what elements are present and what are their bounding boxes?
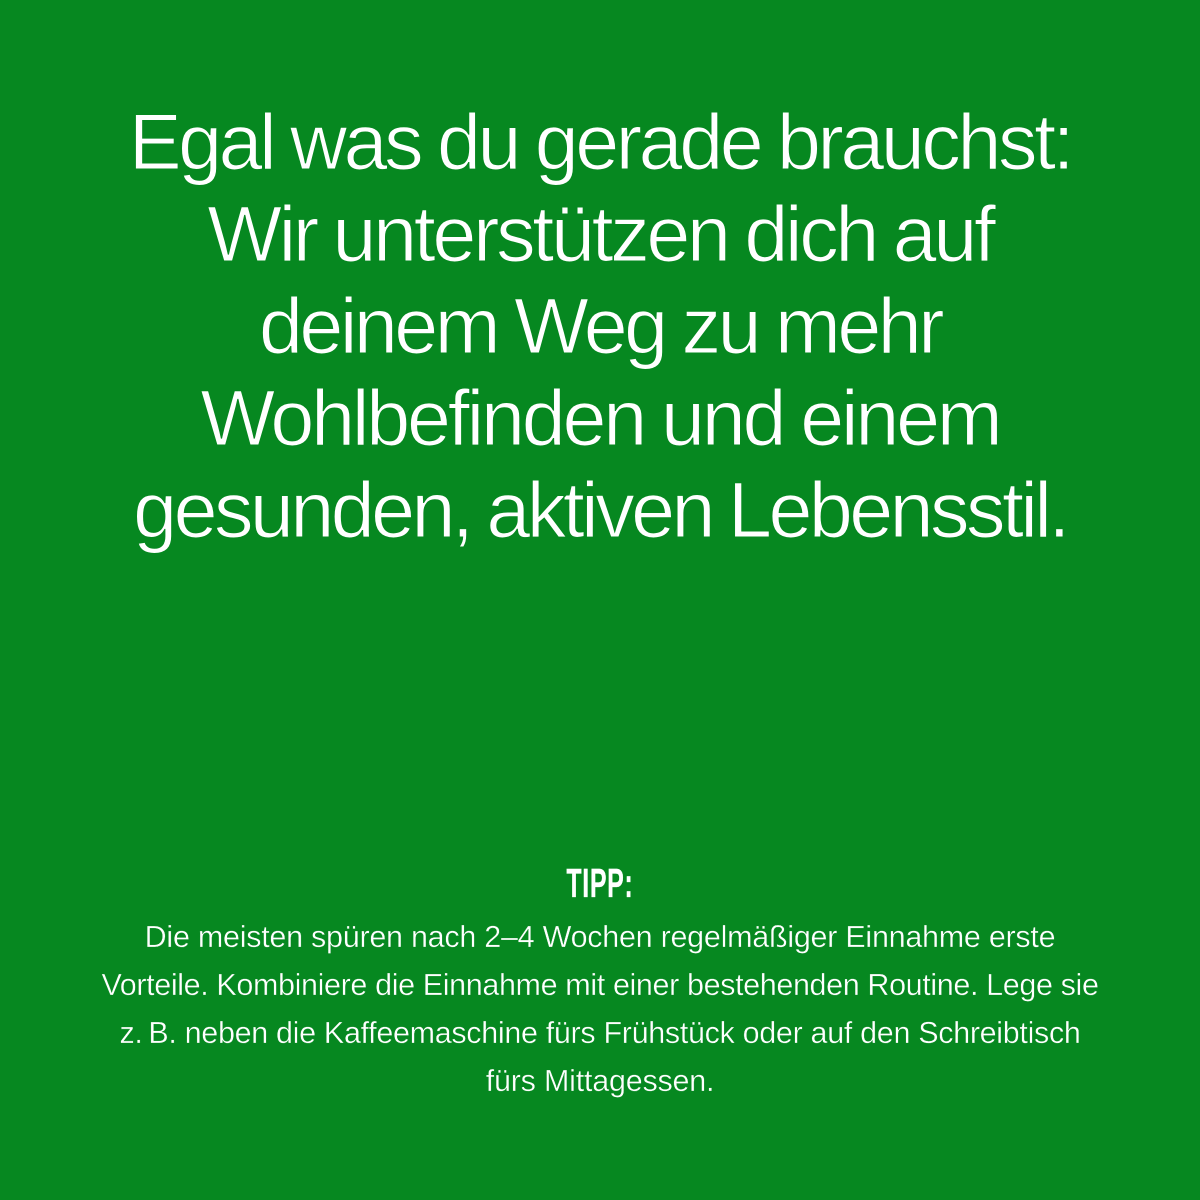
tip text bbox=[101, 920, 1099, 1098]
tip text: z. B. neben die Kaffeemaschine fürs Frühstück oder auf den Schreibtisch bbox=[119, 1016, 1081, 1050]
title bbox=[129, 97, 1071, 554]
title: Egal was du gerade brauchst: bbox=[129, 97, 1071, 186]
tip heading: TIPP: bbox=[567, 860, 633, 906]
title: gesunden, aktiven Lebensstil. bbox=[133, 465, 1067, 554]
tip text: fürs Mittagessen. bbox=[486, 1064, 714, 1098]
title: deinem Weg zu mehr bbox=[259, 281, 941, 370]
tip text: Vorteile. Kombiniere die Einnahme mit einer bestehenden Routine. Lege sie bbox=[101, 968, 1099, 1002]
tip text: Die meisten spüren nach 2–4 Wochen regelmäßiger Einnahme erste bbox=[145, 920, 1055, 954]
title: Wir unterstützen dich auf bbox=[207, 189, 993, 278]
title: Wohlbefinden und einem bbox=[200, 373, 1000, 462]
